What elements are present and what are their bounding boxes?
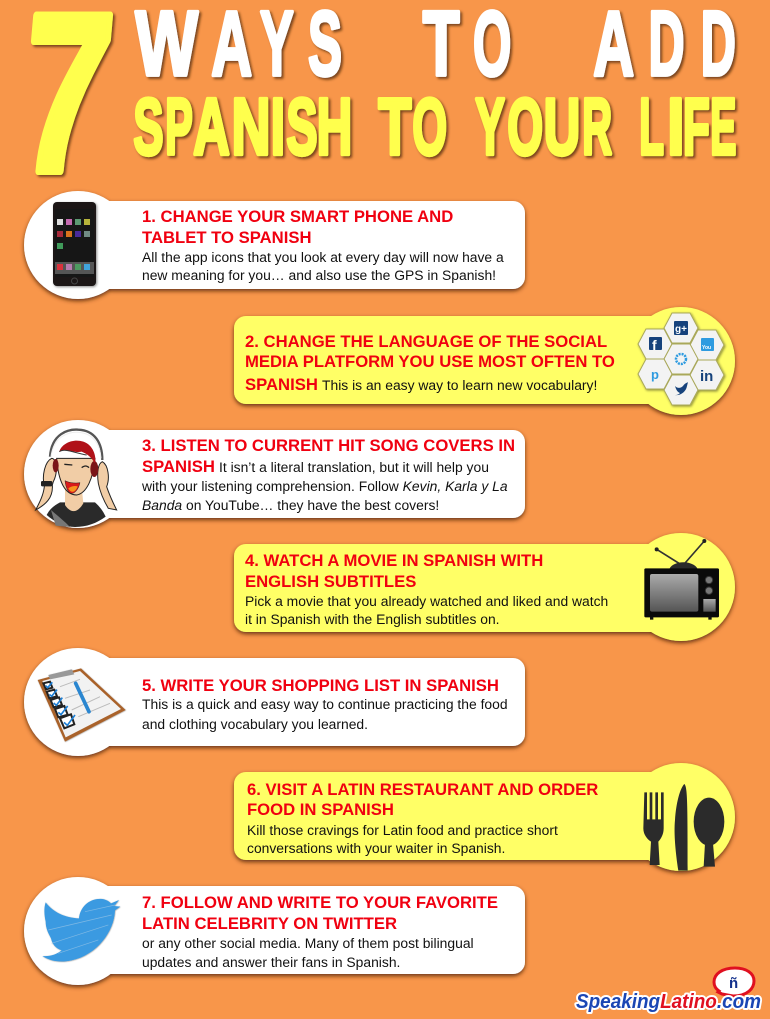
panel 1: smart phone: [24, 191, 525, 299]
icon: fork knife and spoon: [643, 784, 724, 871]
title line 2: U: [544, 82, 580, 172]
title line 2: T: [378, 82, 411, 172]
text 2: This is an easy way to learn new vocabulary!: [322, 377, 597, 393]
text 5: and clothing vocabulary you learned.: [142, 716, 368, 732]
heading 6: 6. VISIT A LATIN RESTAURANT AND ORDER: [247, 780, 598, 799]
text 1: All the app icons that you look at every day will now have a: [142, 249, 504, 265]
title line 1: [135, 0, 736, 96]
panel 7: twitter: [24, 877, 525, 985]
panel 5 background: [24, 648, 525, 756]
icon: girl with headphones: [36, 430, 117, 527]
text 6: Kill those cravings for Latin food and practice short: [247, 822, 558, 838]
panel 6 background: [234, 763, 735, 871]
text 7: updates and answer their fans in Spanish.: [142, 954, 400, 970]
panel 6: restaurant: [234, 763, 735, 871]
panel 7 background: [24, 877, 525, 985]
icon: smart phone: [53, 202, 96, 286]
title line 2: A: [193, 82, 230, 172]
icon: social media hexagons: p: [651, 367, 659, 382]
icon: social media hexagons: in: [700, 368, 713, 385]
heading 6: FOOD IN SPANISH: [247, 800, 394, 819]
icon: twitter bird: [42, 899, 120, 962]
heading 1: TABLET TO SPANISH: [142, 228, 312, 247]
text 3: Banda on YouTube… they have the best covers!: [142, 497, 439, 513]
text 5: This is a quick and easy way to continue practicing the food: [142, 696, 508, 712]
text 4: Pick a movie that you already watched and liked and watch: [245, 593, 608, 609]
panel 4: movie: [234, 533, 735, 641]
heading 2: MEDIA PLATFORM YOU USE MOST OFTEN TO: [245, 352, 615, 371]
title line 2: I: [667, 82, 685, 172]
title line 2: F: [683, 82, 710, 171]
logo speech bubble: ñ: [729, 975, 738, 992]
text 1: new meaning for you… and also use the GPS in Spanish!: [142, 267, 496, 283]
icon: clipboard checklist: [38, 668, 126, 742]
heading 7: LATIN CELEBRITY ON TWITTER: [142, 914, 397, 933]
heading 7: 7. FOLLOW AND WRITE TO YOUR FAVORITE: [142, 893, 498, 912]
logo speech bubble: [714, 968, 754, 996]
text 7: or any other social media. Many of them post bilingual: [142, 935, 474, 951]
icon: social media hexagons: [638, 313, 724, 405]
panel 4 background: [234, 533, 735, 641]
panel 2 background: [234, 307, 735, 415]
panel 5: shopping list: [24, 648, 525, 756]
title line 2: S: [133, 81, 164, 171]
icon: social media hexagons: f: [652, 337, 657, 353]
title line 2: R: [582, 82, 612, 172]
heading 3: 3. LISTEN TO CURRENT HIT SONG COVERS IN: [142, 436, 515, 455]
text 3: It isn’t a literal translation, but it will help you: [219, 459, 489, 475]
title line 2: O: [507, 82, 543, 171]
heading 1: 1. CHANGE YOUR SMART PHONE AND: [142, 207, 453, 226]
icon: social media hexagons: g+: [675, 324, 687, 335]
text 6: conversations with your waiter in Spanish.: [247, 840, 505, 856]
title line 2: E: [710, 83, 736, 172]
text 4: it in Spanish with the English subtitles on.: [245, 611, 500, 627]
title line 2: P: [165, 82, 193, 172]
heading 2: 2. CHANGE THE LANGUAGE OF THE SOCIAL: [245, 332, 607, 351]
title line 2: H: [317, 83, 352, 172]
panel 2: social media: [234, 307, 735, 415]
panel 3: music: [24, 420, 525, 528]
heading 5: 5. WRITE YOUR SHOPPING LIST IN SPANISH: [142, 676, 499, 695]
panel 1 background: [24, 191, 525, 299]
panel 3 background: [24, 420, 525, 528]
text 3: with your listening comprehension. Follow Kevin, Karla y La: [142, 478, 508, 494]
heading 4: ENGLISH SUBTITLES: [245, 572, 416, 591]
title line 2: I: [271, 83, 285, 172]
icon: television: [644, 539, 719, 620]
title line 2: Y: [475, 81, 505, 171]
title line 2: [133, 81, 736, 172]
logo wordmark: SpeakingLatino.com: [576, 991, 761, 1013]
icon: social media hexagons: You: [702, 345, 711, 351]
title line 2: N: [232, 82, 270, 172]
title line 2: S: [286, 82, 318, 171]
heading 4: 4. WATCH A MOVIE IN SPANISH WITH: [245, 551, 543, 570]
title line 2: L: [639, 83, 664, 172]
heading 3: SPANISH: [142, 457, 215, 476]
logo: SpeakingLatino.com: [576, 968, 761, 1013]
heading 2: SPANISH: [245, 375, 318, 394]
title line 2: O: [412, 81, 447, 171]
